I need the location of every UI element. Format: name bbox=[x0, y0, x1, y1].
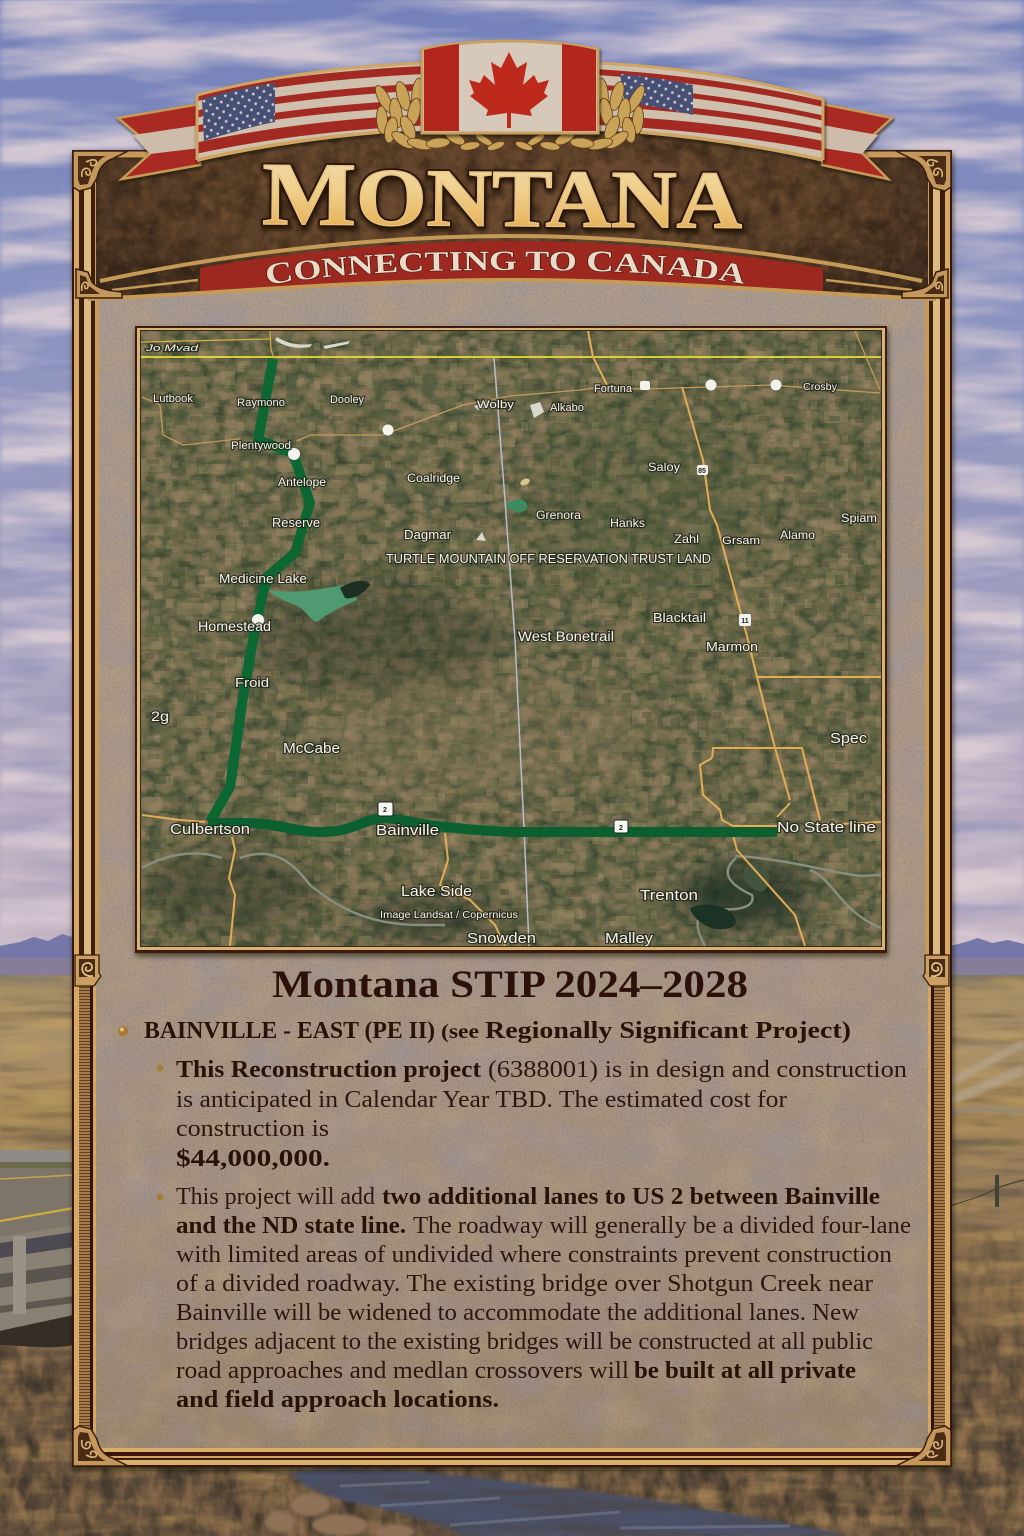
rivers bbox=[142, 853, 881, 946]
text: project heading bbox=[144, 1017, 851, 1044]
text: scope paragraph: be built at all private bbox=[634, 1357, 856, 1384]
text: reconstruction paragraph bbox=[176, 1056, 907, 1172]
frame: bottom-right corner ornament bbox=[896, 1426, 951, 1466]
map: satellite imagery bbox=[140, 331, 881, 947]
text: scope paragraph: The roadway will generally be a divided four-lane bbox=[413, 1212, 911, 1239]
background: prairie bbox=[0, 975, 1024, 1536]
map labels: Medicine Lake bbox=[219, 571, 307, 586]
bullet: project heading marker bbox=[118, 1026, 128, 1036]
text: scope paragraph: and field approach locations. bbox=[176, 1386, 499, 1413]
title: MONTANA: MONTANA bbox=[262, 145, 743, 248]
lake bbox=[268, 585, 357, 622]
highway shields: 85 bbox=[698, 468, 706, 475]
background: stream at the bottom bbox=[266, 1466, 860, 1536]
map labels: TURTLE MOUNTAIN OFF RESERVATION TRUST LAND bbox=[386, 552, 711, 566]
map labels: Reserve bbox=[272, 516, 320, 530]
orange roads bbox=[142, 331, 881, 946]
map labels: Bainville bbox=[376, 823, 439, 839]
map labels: Alkabo bbox=[550, 402, 584, 414]
frame: bottom-left corner ornament bbox=[73, 1426, 128, 1466]
text: scope paragraph: This project will add bbox=[176, 1183, 375, 1210]
title: MONTANA: MONTANA bbox=[262, 145, 743, 248]
frame base bbox=[72, 150, 952, 1467]
map labels: Spiam bbox=[841, 511, 877, 525]
panel: ornate frame and parchment bbox=[72, 150, 952, 1467]
highway shields: 11 bbox=[741, 618, 749, 625]
route: highlighted project highway bbox=[210, 359, 310, 822]
map labels: Grsam bbox=[722, 535, 760, 547]
frame: left scroll ornament bbox=[75, 955, 101, 986]
frame: right scroll ornament bbox=[923, 955, 949, 986]
text: scope paragraph bbox=[176, 1183, 911, 1413]
map labels: Lake Side bbox=[401, 883, 472, 900]
text: reconstruction paragraph: This Reconstruction project bbox=[176, 1056, 482, 1083]
map labels: No State line bbox=[777, 820, 876, 836]
map labels: Raymono bbox=[237, 397, 285, 409]
heading: Montana STIP 2024–2028: Montana STIP 2024–2028 bbox=[272, 963, 748, 1006]
frame: top rail left bbox=[74, 151, 198, 158]
map labels: Plentywood bbox=[231, 440, 291, 452]
US canton left bbox=[202, 83, 275, 141]
map labels: Saloy bbox=[648, 460, 680, 474]
text: project heading: (see bbox=[441, 1021, 479, 1043]
flag: US ribbon right bbox=[596, 63, 823, 160]
map labels: Fortuna bbox=[594, 383, 633, 395]
banner: connecting to Canada bbox=[88, 234, 936, 301]
frame: top rail right bbox=[824, 151, 950, 158]
text: reconstruction paragraph: $44,000,000. bbox=[176, 1145, 330, 1172]
text: scope paragraph: two additional lanes to US 2 between Bainville bbox=[382, 1183, 880, 1210]
text: reconstruction paragraph: construction is bbox=[176, 1115, 329, 1142]
map labels: Blacktail bbox=[653, 610, 706, 625]
flag: Canada bbox=[422, 41, 598, 133]
text: scope paragraph: of a divided roadway. The existing bridge over Shotgun Creek near bbox=[176, 1270, 873, 1297]
border line bbox=[141, 356, 881, 358]
frame: top-left corner ornament bbox=[73, 151, 128, 191]
text: scope paragraph: Bainville will be widened to accommodate the additional lanes. New bbox=[176, 1299, 859, 1326]
map labels: Zahl bbox=[674, 532, 699, 546]
text: project heading: BAINVILLE - EAST (PE II) bbox=[144, 1017, 435, 1044]
map labels: Trenton bbox=[640, 887, 698, 904]
map labels: Homestead bbox=[198, 618, 271, 634]
tan roads bbox=[142, 331, 880, 445]
frame: left column bbox=[74, 152, 99, 1464]
map labels: Jo Mvad bbox=[144, 343, 200, 353]
map labels: Snowden bbox=[467, 930, 536, 947]
map labels: Hanks bbox=[610, 516, 645, 530]
frame: mid-left corner ornament bbox=[76, 269, 122, 298]
parchment panel bbox=[96, 160, 928, 1450]
flag: US ribbon left bbox=[197, 63, 424, 160]
highway shields: 2 bbox=[383, 807, 387, 814]
bullet: reconstruction paragraph marker bbox=[157, 1065, 163, 1071]
state line bbox=[494, 358, 529, 946]
map labels: Spec bbox=[830, 731, 867, 747]
icon: laurel right bbox=[514, 77, 648, 152]
map: frame bbox=[135, 326, 887, 953]
map labels: Coalridge bbox=[407, 471, 460, 485]
background: dirt track at right bbox=[950, 1045, 1024, 1112]
map labels bbox=[144, 343, 877, 947]
background: sky with cloud bands bbox=[0, 0, 1024, 975]
highway shields: 2 bbox=[619, 825, 623, 832]
ribbon: left tail bbox=[118, 104, 200, 179]
white lake patches bbox=[275, 337, 544, 541]
text: project heading: Regionally Significant Project) bbox=[485, 1017, 851, 1044]
map labels: West Bonetrail bbox=[518, 629, 614, 644]
icon: maple leaf bbox=[469, 52, 549, 128]
text: scope paragraph: road approaches and medlan crossovers will bbox=[176, 1357, 629, 1384]
highway shields bbox=[252, 380, 782, 833]
banner text: CONNECTING TO CANADA bbox=[266, 250, 744, 284]
map labels: Antelope bbox=[278, 475, 326, 489]
US canton right bbox=[620, 74, 693, 115]
map labels: Dagmar bbox=[404, 528, 451, 542]
map labels: Froid bbox=[235, 675, 269, 690]
map labels: Marmon bbox=[706, 639, 758, 654]
text: scope paragraph: and the ND state line. bbox=[176, 1212, 406, 1239]
background: distant mountains bbox=[0, 934, 1024, 982]
map labels: Image Landsat / Copernicus bbox=[380, 909, 518, 921]
text: reconstruction paragraph: is anticipated in Calendar Year TBD. The estimated cost for bbox=[176, 1086, 787, 1113]
map labels: Culbertson bbox=[170, 822, 250, 838]
frame: mid-right corner ornament bbox=[902, 269, 948, 298]
map labels: Malley bbox=[605, 930, 654, 947]
map labels: McCabe bbox=[283, 741, 340, 757]
frame: top-right corner ornament bbox=[896, 151, 951, 191]
frame: bottom rail bbox=[74, 1448, 950, 1465]
icon: laurel left bbox=[372, 77, 506, 152]
map labels: 2g bbox=[151, 708, 169, 724]
bullet: scope paragraph marker bbox=[157, 1194, 163, 1200]
text: scope paragraph: with limited areas of undivided where constraints prevent construction bbox=[176, 1241, 892, 1268]
map labels: Grenora bbox=[536, 508, 581, 522]
map labels: Wolby bbox=[477, 399, 515, 411]
text: scope paragraph: bridges adjacent to the existing bridges will be constructed at all public bbox=[176, 1328, 873, 1355]
dark river bends bbox=[690, 905, 736, 929]
map labels: Lutbook bbox=[153, 393, 193, 405]
map labels: Crosby bbox=[803, 382, 837, 393]
header: brown textured plate bbox=[96, 120, 928, 300]
icon: fence post bbox=[952, 1175, 1024, 1207]
background: road and bridge at left bbox=[0, 1150, 74, 1347]
frame: right column bbox=[925, 152, 950, 1464]
text: reconstruction paragraph: (6388001) is in design and construction bbox=[488, 1056, 907, 1083]
map labels: Alamo bbox=[780, 528, 815, 542]
ribbon: right tail bbox=[822, 104, 892, 179]
map labels: Dooley bbox=[330, 394, 364, 406]
